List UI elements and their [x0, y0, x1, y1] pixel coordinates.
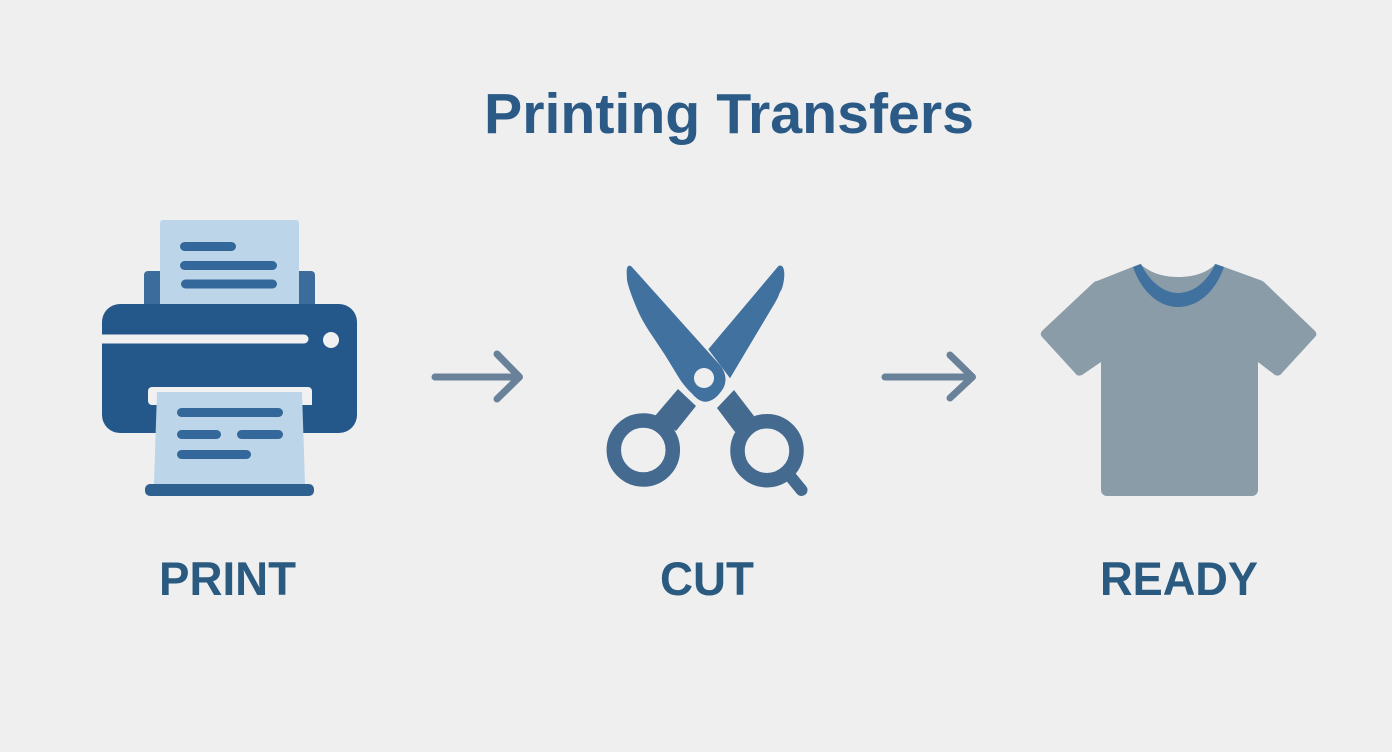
label: cut: CUT	[660, 552, 754, 605]
shirt collar	[1133, 264, 1224, 307]
scissors right handle	[717, 390, 802, 490]
printer body	[102, 304, 357, 433]
title: Printing Transfers	[484, 82, 974, 146]
icon: scissors	[614, 266, 802, 490]
printer base	[145, 484, 314, 496]
shirt body	[1041, 264, 1316, 496]
scissors left blade with pivot	[627, 266, 726, 402]
arrow: print to cut	[435, 354, 520, 399]
arrow: cut to ready	[885, 355, 972, 398]
scissors right blade	[708, 266, 784, 378]
printer rear tray	[144, 271, 315, 304]
icon: printer	[102, 220, 357, 496]
printer output paper	[154, 392, 305, 484]
icon: t-shirt	[1041, 264, 1316, 496]
label: ready: READY	[1100, 552, 1258, 605]
printer output slot	[148, 387, 312, 405]
printer button	[323, 332, 339, 348]
printer top paper	[160, 220, 299, 304]
label: print: PRINT	[159, 552, 296, 605]
scissors left handle	[614, 389, 696, 480]
printer slit	[102, 334, 308, 344]
